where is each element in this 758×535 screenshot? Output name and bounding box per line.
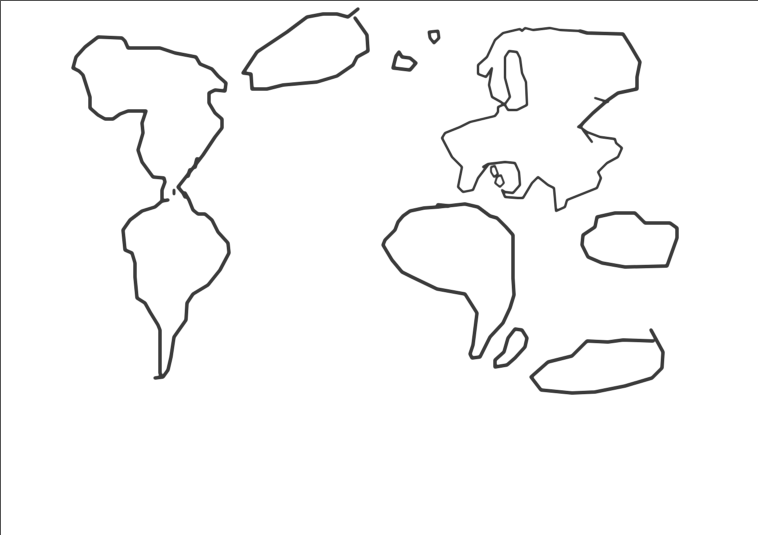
inland sea islands xyxy=(491,166,504,187)
Madagascar outline xyxy=(495,329,527,367)
Greenland outline xyxy=(243,9,368,89)
Australia outline xyxy=(582,213,677,267)
small island outline xyxy=(429,31,439,43)
South America outline xyxy=(123,190,229,378)
Iceland outline xyxy=(393,52,416,70)
Antarctica outline xyxy=(531,330,663,393)
North America outline xyxy=(73,37,226,201)
Africa outline xyxy=(383,204,514,358)
Eurasia outline xyxy=(442,28,640,211)
